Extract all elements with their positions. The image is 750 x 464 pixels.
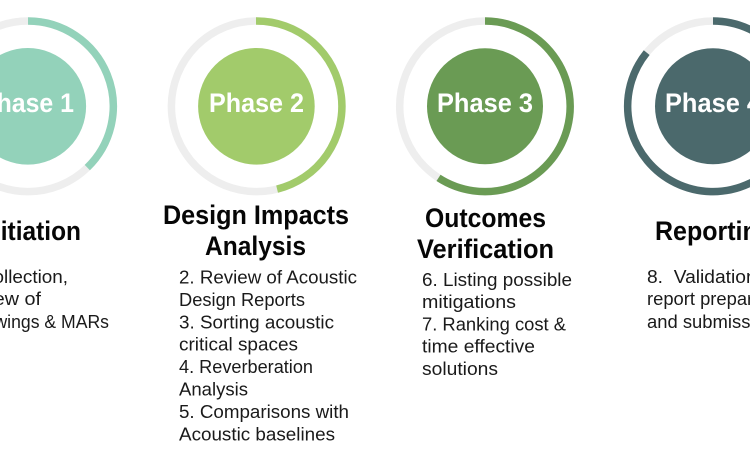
text block: phase 3 steps: 6. Listing possible — [422, 269, 572, 290]
panel: phase 3 — [400, 21, 572, 379]
text block: phase 4 steps — [647, 266, 750, 332]
text block: phase 2 steps — [179, 266, 357, 444]
progress ring: phase 3 — [400, 21, 570, 192]
heading: design impacts analysis — [163, 200, 349, 261]
badge: phase 3: Phase 3 — [437, 88, 533, 118]
heading: design impacts analysis: Analysis — [205, 231, 306, 261]
text block: phase 3 steps: solutions — [422, 358, 498, 379]
text block: phase 2 steps: 5. Comparisons with — [179, 401, 349, 422]
text block: phase 2 steps: 3. Sorting acoustic — [179, 311, 334, 332]
text block: phase 3 steps: time effective — [422, 336, 535, 357]
text block: phase 2 steps: Design Reports — [179, 289, 305, 310]
heading: outcomes verification: Verification — [417, 234, 554, 264]
badge: phase 3 — [427, 48, 543, 164]
panel: phase 2 — [163, 21, 357, 444]
progress ring: phase 4 — [628, 21, 750, 192]
text block: phase 3 steps — [422, 269, 572, 379]
progress ring: phase 2 — [171, 21, 342, 192]
heading: outcomes verification — [417, 203, 554, 264]
text block: phase 2 steps: Analysis — [179, 378, 248, 400]
panel: phase 4 — [628, 21, 750, 332]
text block: phase 3 steps: mitigations — [422, 291, 516, 312]
text block: phase 2 steps: 2. Review of Acoustic — [179, 266, 357, 288]
progress ring: phase 1 — [0, 21, 113, 192]
heading: outcomes verification: Outcomes — [425, 203, 546, 233]
text block: phase 2 steps: Acoustic baselines — [179, 423, 335, 444]
badge: phase 1 — [0, 48, 86, 165]
text block: phase 2 steps: 4. Reverberation — [179, 356, 313, 377]
badge: phase 2 — [198, 48, 315, 165]
text block: phase 3 steps: 7. Ranking cost & — [422, 314, 567, 334]
text block: phase 2 steps: critical spaces — [179, 334, 298, 355]
text block: phase 1 steps — [0, 266, 109, 332]
panel: phase 1 — [0, 21, 113, 332]
badge: phase 2: Phase 2 — [209, 88, 304, 118]
badge: phase 4 — [655, 48, 750, 164]
heading: design impacts analysis: Design Impacts — [163, 200, 349, 230]
